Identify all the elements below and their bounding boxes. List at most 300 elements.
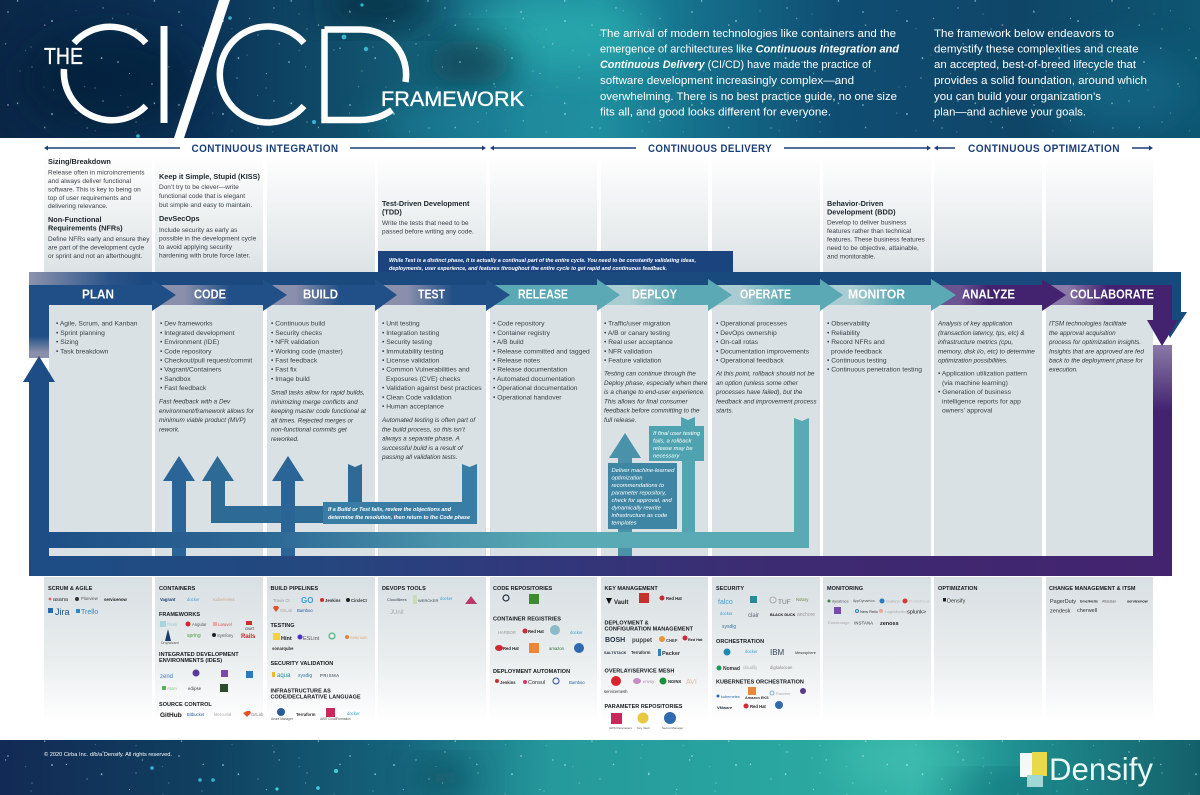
- deploy column text: This allows for final consumer: [604, 398, 688, 405]
- tools: code: SOURCE CONTROL: [159, 702, 212, 708]
- arrow: optimization recommendations: check for approval, and: [612, 498, 673, 504]
- build column text: • Security checks: [271, 330, 323, 337]
- tools: operate: Mesosphere: [795, 651, 816, 655]
- tools: build: Terraform: [296, 712, 316, 717]
- practice: TDD: Test-Driven Development: [382, 199, 470, 208]
- callout: rollback: release may be: [653, 446, 693, 452]
- tools: monitor: Grafana: [886, 600, 901, 604]
- tools: operate: clair: [748, 613, 759, 619]
- tools: code: Symfony: [217, 633, 234, 638]
- tools: deploy: CHEF: [666, 638, 678, 643]
- operate column text: feedback and improvement process: [716, 398, 817, 405]
- arrow: optimization recommendations: parameter repository,: [610, 490, 666, 496]
- build column text: • Working code (master): [271, 348, 343, 356]
- practice: BDD: Develop to deliver business: [827, 220, 907, 226]
- tools: code: GitLab: [251, 712, 264, 717]
- tools: code: zend: [160, 674, 173, 680]
- tools: monitor: LogicMonitor: [885, 610, 907, 614]
- monitor column text: • Reliability: [827, 330, 860, 337]
- collaborate column text: Insights that are approved are fed: [1049, 348, 1144, 356]
- intro paragraph left: Continuous Delivery (CI/CD) have made the practice of: [600, 59, 881, 71]
- release column text: • Release committed and tagged: [493, 348, 590, 356]
- tools: build: AWS CloudFormation: [320, 717, 351, 721]
- tools: collaborate: cherwell: [1077, 608, 1097, 614]
- release column text: • Container registry: [493, 330, 551, 337]
- tools: deploy: [604, 586, 703, 730]
- tools: code: eclipse: [188, 686, 202, 691]
- tools: deploy: PARAMETER REPOSITORIES: [604, 704, 683, 710]
- build column text: • NFR validation: [271, 339, 319, 346]
- code column text: • Sandbox: [160, 376, 191, 383]
- tools: test: [382, 586, 477, 616]
- deploy column text: • NFR validation: [604, 348, 652, 356]
- tools: plan: [48, 586, 128, 617]
- tools: deploy: servicemesh: [604, 689, 628, 694]
- tools: plan: Trello: [81, 609, 98, 616]
- analyze column text: (transaction latency, tps, etc) &: [938, 330, 1025, 337]
- arrow: return to code 1: [163, 456, 195, 556]
- test callout banner: deployments, user experience, and features throughout the entire cycle to get rapid and continuous feedback.: [389, 266, 667, 272]
- build column text: • Continuous build: [271, 320, 325, 328]
- middle column panels: [49, 300, 1153, 556]
- intro paragraph left: The arrival of modern technologies like containers and the: [600, 28, 896, 40]
- tools: code: Kubernetes: [213, 597, 234, 602]
- tools: code: CONTAINERS: [159, 586, 196, 592]
- tools: test: JUnit: [390, 610, 404, 616]
- operate column text: [715, 320, 817, 414]
- practice: TDD: passed before writing any code.: [382, 228, 474, 236]
- arrow: collaborate: [1042, 285, 1172, 305]
- phase arrows: [29, 279, 1172, 320]
- code column text: • Dev frameworks: [160, 320, 213, 328]
- arrow: monitor: [820, 279, 956, 311]
- tools: release: docker: [570, 630, 583, 635]
- tools: code: Vagrant: [160, 597, 176, 602]
- test column text: successful build is a result of: [382, 445, 464, 452]
- practice: KISS and DevSecOps: Don’t try to be clever—write: [159, 184, 239, 191]
- tools: deploy: puppet: [632, 638, 652, 644]
- tools: plan: Planview: [81, 596, 99, 601]
- test column text: Automated testing is often part of: [381, 417, 476, 424]
- analyze column text: Analysis of key application: [937, 320, 1013, 328]
- tools: release: amazon: [549, 646, 565, 651]
- tools: build: GitLab: [280, 608, 293, 613]
- arrow: optimization recommendations: recommendations to: [612, 483, 665, 489]
- tools: monitor: MONITORING: [827, 586, 863, 592]
- tools: deploy: AVI: [686, 679, 697, 686]
- tools: analyze: [938, 586, 978, 604]
- tools: deploy: Terraform: [631, 650, 651, 655]
- loop arrow up on the left side: [23, 285, 55, 576]
- intro paragraph right: provides a solid foundation, around which: [934, 75, 1147, 87]
- test column text: • Clean Code validation: [382, 394, 452, 402]
- analyze column text: [937, 320, 1035, 414]
- practice: KISS and DevSecOps: Include security as early as: [159, 227, 238, 234]
- practice: KISS and DevSecOps: [159, 172, 261, 260]
- operate column text: • Operational feedback: [716, 358, 784, 364]
- test column text: the build process, so this isn’t: [382, 426, 465, 433]
- intro paragraph left: fits all, and good looks different for everyone.: [600, 106, 831, 118]
- practice: TDD: (TDD): [382, 208, 402, 216]
- tools: operate: IBM: [770, 648, 785, 657]
- tools: build: CircleCI: [351, 598, 367, 603]
- arrow: return to code 2: [202, 456, 362, 523]
- test column text: • Unit testing: [382, 320, 420, 328]
- arrow: plan: [29, 279, 176, 320]
- practice: sizing and NFRs: are part of the development cycle: [48, 244, 144, 252]
- tools: test: DEVOPS TOOLS: [382, 586, 426, 592]
- operate column text: an option (unless some other: [716, 380, 799, 387]
- arrow: test: [375, 279, 510, 311]
- build column text: reworked.: [271, 436, 299, 443]
- tools: operate: docker: [720, 611, 733, 616]
- analyze column text: memory, disk i/o, etc) to determine: [938, 348, 1035, 356]
- practice: sizing and NFRs: Requirements (NFRs): [48, 224, 123, 232]
- phase labels: [82, 286, 1154, 302]
- code column text: environment/framework allows for: [159, 408, 255, 415]
- deploy column text: • Feature validation: [604, 358, 662, 364]
- arrow: release: [486, 279, 620, 311]
- analyze column text: • Application utilization pattern: [938, 370, 1027, 378]
- intro paragraph left: emergence of architectures like Continuous Integration and: [600, 44, 904, 56]
- practice: sizing and NFRs: Non-Functional: [48, 215, 102, 224]
- monitor column text: • Continuous testing: [827, 358, 887, 364]
- operate column text: • On-call rotas: [716, 339, 759, 346]
- deploy column text: • A/B or canary testing: [604, 330, 670, 337]
- outer loop: top band: [29, 272, 1181, 286]
- practice: sizing and NFRs: Release often in microincrements: [48, 170, 145, 176]
- code column text: minimum viable product (MVP): [159, 417, 246, 424]
- arrow: return to build: [272, 456, 304, 556]
- practice: TDD: Write the tests that need to be: [382, 220, 469, 227]
- intro paragraph left: overwhelming. There is no best practice guide, no one size: [600, 91, 897, 103]
- operate column text: • Operational processes: [716, 320, 788, 328]
- arrow: optimization recommendations: [608, 433, 677, 556]
- tools: release: Consul: [528, 680, 545, 686]
- phase labels: CODE: [194, 286, 226, 302]
- arrow: optimization recommendations: optimization: [612, 476, 642, 482]
- top column panels: [44, 154, 1153, 272]
- code column text: • Checkout/pull request/commit: [160, 358, 252, 364]
- build column text: • Fast feedback: [271, 358, 318, 364]
- practice: KISS and DevSecOps: DevSecOps: [159, 214, 200, 223]
- arrow: optimization recommendations: Deliver machine-learned: [612, 468, 675, 474]
- deploy column text: • Real user acceptance: [604, 339, 673, 346]
- practice: BDD: Behavior-Driven: [827, 199, 883, 208]
- tools: build: docker: [347, 711, 360, 716]
- tools: monitor: [827, 586, 930, 627]
- intro paragraph right: The framework below endeavors to: [934, 28, 1114, 40]
- loop arrow down on the right side: [1147, 272, 1187, 576]
- test column text: • Immutability testing: [382, 348, 444, 356]
- arrow: analyze: [931, 279, 1066, 311]
- tools: build: TESTING: [270, 623, 295, 629]
- build column text: • Fast fix: [271, 366, 297, 374]
- deploy column text: Deploy phase, especially when there: [604, 380, 708, 387]
- deploy column text: is a change to end-user experience.: [604, 389, 705, 396]
- tools: deploy: Secret Manager: [662, 726, 683, 730]
- title: The CI/CD Framework: THE: [44, 43, 83, 69]
- phase labels: DEPLOY: [632, 286, 677, 302]
- tools: code: docker: [187, 597, 200, 602]
- monitor column text: • Observability: [827, 320, 871, 328]
- tools: code: INTEGRATED DEVELOPMENT: [159, 652, 239, 658]
- tools: analyze: OPTIMIZATION: [938, 586, 978, 592]
- practice: sizing and NFRs: delivering relevance.: [48, 203, 108, 210]
- test column text: always a separate phase. A: [382, 436, 460, 442]
- tools: deploy: KEY MANAGEMENT: [604, 586, 658, 592]
- phase labels: MONITOR: [848, 286, 905, 302]
- tools: test: docker: [440, 596, 453, 601]
- code column text: • Integrated development: [160, 330, 235, 337]
- logo: Densify: Densify: [1049, 751, 1153, 787]
- monitor column text: • Record NFRs and: [827, 339, 885, 346]
- tools: build: sysdig: [298, 673, 312, 679]
- analyze column text: infrastructure metrics (cpu,: [938, 339, 1013, 346]
- operate column text: starts.: [716, 408, 733, 414]
- arrow: build: [263, 279, 397, 311]
- tools: build: CODE/DECLARATIVE LANGUAGE: [270, 694, 361, 700]
- tools: operate: cloudify: [743, 665, 758, 670]
- tools: collaborate: servicenow: [1127, 600, 1148, 604]
- section header: continuous delivery: CONTINUOUS DELIVERY: [648, 143, 772, 155]
- tools: test: WERCKER: [418, 598, 439, 603]
- tools: plan: SCRUM & AGILE: [48, 586, 93, 592]
- practice: sizing and NFRs: top of user requirements and: [48, 195, 131, 202]
- tools: code: FRAMEWORKS: [159, 612, 200, 618]
- practice: KISS and DevSecOps: possible in the development cycle: [159, 236, 257, 242]
- phase labels: TEST: [418, 286, 445, 302]
- operate column text: At this point, rollback should not be: [715, 370, 815, 378]
- collaborate column text: back to the deployment phase for: [1049, 358, 1144, 364]
- feedback bar: [49, 532, 809, 548]
- practice: sizing and NFRs: and always deliver functional: [48, 178, 132, 185]
- section header: continuous integration: CONTINUOUS INTEGRATION: [192, 143, 338, 155]
- practice: KISS and DevSecOps: Keep it Simple, Stupid (KISS): [159, 172, 261, 181]
- test column text: [381, 320, 482, 461]
- phase labels: PLAN: [82, 286, 114, 302]
- arrow: operate: [708, 279, 843, 311]
- deploy column text: • Traffic/user migration: [604, 320, 671, 328]
- code column text: • Code repository: [160, 348, 212, 356]
- practice: BDD: features rather than technical: [827, 228, 912, 235]
- callout: rollback: If final user testing: [653, 431, 701, 437]
- tools: code: Laravel: [218, 622, 232, 627]
- tools: deploy: Packer: [662, 651, 681, 657]
- tools: monitor: INSTANA: [854, 620, 873, 626]
- tools: test: CloudBees: [387, 597, 407, 602]
- tools: build: SECURITY VALIDATION: [270, 661, 333, 667]
- tools: deploy: CONFIGURATION MANAGEMENT: [604, 626, 694, 632]
- tools: deploy: Red Hat: [688, 638, 703, 642]
- test column text: Exposures (CVE) checks: [386, 376, 461, 383]
- practice: BDD: and monitorable.: [827, 254, 876, 260]
- tools: deploy: AWS Parameters: [609, 726, 633, 730]
- code column text: • Fast feedback: [160, 385, 207, 392]
- phase labels: OPERATE: [740, 286, 791, 302]
- test column text: • Security testing: [382, 339, 432, 346]
- release column text: • Operational handover: [493, 394, 562, 402]
- deploy column text: [604, 320, 708, 424]
- tools: monitor: Prometheus: [909, 600, 930, 604]
- practice: sizing and NFRs: Sizing/Breakdown: [48, 157, 111, 166]
- arrow: optimization recommendations: templates: [612, 520, 637, 526]
- tools: release: Bamboo: [569, 680, 585, 685]
- tools: deploy: Key Vault: [637, 726, 650, 730]
- collaborate column text: ITSM technologies facilitate: [1049, 320, 1127, 328]
- tools: deploy: NGINX: [668, 679, 681, 684]
- tools: release: HARBOR: [498, 630, 516, 635]
- practice: sizing and NFRs: software. This is key to being on: [48, 186, 141, 194]
- practice: sizing and NFRs: [48, 157, 150, 260]
- tools: collaborate: PagerDuty: [1050, 599, 1076, 605]
- callout: rollback: [649, 417, 704, 533]
- bottom tool panels: [44, 577, 1153, 722]
- tools: monitor: dynatrace: [832, 600, 849, 604]
- tools: operate: Rancher: [776, 692, 791, 696]
- test column text: • Human acceptance: [382, 404, 444, 410]
- release column text: • Code repository: [493, 320, 545, 328]
- tools: operate: ORCHESTRATION: [716, 639, 764, 645]
- tools: deploy: BOSH: [605, 637, 625, 644]
- tools: plan: servicenow: [104, 597, 128, 602]
- operate column text: • Documentation improvements: [716, 348, 810, 356]
- plan column text: • Task breakdown: [56, 348, 109, 356]
- tools: build: GO: [301, 596, 313, 605]
- tools: release: DEPLOYMENT AUTOMATION: [493, 669, 570, 675]
- monitor column text: • Continuous penetration testing: [827, 366, 922, 374]
- test column text: • Validation against best practices: [382, 385, 482, 392]
- build column text: • Image build: [271, 376, 310, 383]
- callout: build or test fails: [323, 464, 477, 524]
- tools: release: CODE REPOSITORIES: [493, 586, 553, 592]
- tools: collaborate: [1049, 586, 1148, 614]
- collaborate column text: the approval acquisition: [1049, 330, 1116, 337]
- tools: monitor: splunk>: [907, 610, 926, 616]
- test column text: • Common Vulnerabilities and: [382, 366, 470, 374]
- tools: build: aqua: [277, 673, 291, 679]
- practice: BDD: Development (BDD): [827, 208, 896, 216]
- tools: build: Azure Manager: [271, 717, 294, 721]
- arrow: optimization recommendations: infrastructure as code: [612, 513, 668, 519]
- tools: deploy: envoy: [643, 679, 655, 684]
- tools: code: Angular: [192, 622, 207, 627]
- intro paragraph right: plan—and achieve your goals.: [934, 106, 1086, 118]
- tools: operate: falco: [718, 599, 733, 606]
- tools: collaborate: CHANGE MANAGEMENT & ITSM: [1049, 586, 1136, 592]
- tools: build: [270, 586, 368, 721]
- tools: release: [493, 586, 585, 686]
- practice: KISS and DevSecOps: but simple and easy to maintain.: [159, 202, 252, 209]
- tools: monitor: Elasticstage: [828, 620, 850, 625]
- plan column text: • Agile, Scrum, and Kanban: [56, 320, 138, 328]
- tools: code: GWT: [245, 626, 255, 631]
- tools: operate: Red Hat: [750, 704, 766, 709]
- build column text: keeping master code functional at: [271, 408, 366, 415]
- tools: operate: kubernetes: [721, 695, 740, 699]
- arrow: optimization recommendations: dynamically rewrite: [612, 506, 662, 512]
- teal rollback column: [794, 418, 809, 548]
- callout: rollback: fails, a rollback: [653, 438, 692, 444]
- release column text: • Release notes: [493, 358, 541, 364]
- tools: collaborate: zendesk: [1050, 608, 1071, 614]
- tools: code: GitHub: [160, 712, 182, 719]
- practice: TDD: [382, 199, 474, 236]
- build column text: all times. Rejected merges or: [271, 417, 354, 424]
- plan column text: • Sprint planning: [56, 330, 105, 337]
- tools: operate: Amazon EKS: [745, 696, 769, 700]
- phase labels: COLLABORATE: [1070, 286, 1154, 302]
- analyze column text: • Generation of business: [938, 389, 1012, 396]
- callout: build or test fails: If a Build or Test fails, review the objections and: [328, 507, 457, 513]
- callout: build or test fails: determine the resolution, then return to the Code phase: [328, 515, 471, 521]
- tools: operate: digitalocean: [770, 665, 793, 670]
- practice: KISS and DevSecOps: functional code that is elegant: [159, 193, 245, 200]
- bottom band of the loop: [29, 556, 1172, 576]
- build column text: minimizing merge conflicts and: [271, 399, 358, 406]
- tools: build: Hint: [281, 636, 292, 642]
- tools: operate: VMware: [717, 705, 733, 710]
- collaborate column text: execution.: [1049, 366, 1078, 374]
- tools: operate: SECURITY: [716, 586, 744, 592]
- code column text: Fast feedback with a Dev: [159, 398, 231, 406]
- release column text: • Operational documentation: [493, 385, 578, 392]
- tools: monitor: New Relic: [860, 609, 878, 614]
- arrow: code: [152, 279, 287, 311]
- tools: code: Dropwizard: [161, 641, 179, 645]
- tools: release: CONTAINER REGISTRIES: [493, 616, 561, 622]
- tools: release: Red Hat: [528, 629, 544, 634]
- tools: deploy: OVERLAY/SERVICE MESH: [604, 668, 674, 674]
- footer background: nebula: [0, 740, 1200, 795]
- copyright: © 2020 Cirba Inc. d/b/a Densify. All rights reserved.: [44, 751, 172, 758]
- deploy column text: full release.: [604, 417, 636, 424]
- practice: KISS and DevSecOps: hardening with brute force later.: [159, 252, 250, 260]
- build column text: Small tasks allow for rapid builds,: [271, 390, 365, 396]
- practice: BDD: features. These business features: [827, 236, 926, 244]
- tools: plan: asana: [53, 597, 69, 603]
- tools: operate: sysdig: [722, 624, 736, 630]
- plan column text: • Sizing: [56, 339, 79, 346]
- tools: operate: TUF: [778, 599, 791, 606]
- intro paragraph left: software development increasingly complex—and: [600, 75, 854, 87]
- tools: deploy: Vault: [614, 600, 628, 606]
- test column text: • License validation: [382, 358, 440, 364]
- tools: build: BUILD PIPELINES: [270, 586, 318, 592]
- tools: operate: Nomad: [723, 666, 740, 672]
- header background: space nebula: [0, 0, 1200, 145]
- tools: collaborate: Atlassian: [1102, 600, 1116, 604]
- tools: operate: BLACK DUCK: [770, 613, 796, 617]
- test callout banner: [378, 251, 733, 275]
- tools: operate: [716, 586, 816, 710]
- section header: continuous delivery: [490, 143, 931, 155]
- release column text: • A/B build: [493, 339, 524, 346]
- test callout banner: While Test is a distinct phase, it is actually a continual part of the entire cycle. You need to be constantly validating ideas,: [389, 258, 721, 264]
- title: The CI/CD Framework: FRAMEWORK: [381, 88, 524, 111]
- analyze column text: (via machine learning): [942, 380, 1008, 387]
- tools: build: INFRASTRUCTURE AS: [270, 688, 331, 694]
- tools: code: Atom: [167, 686, 177, 691]
- deploy column text: Testing can continue through the: [604, 370, 696, 378]
- tools: code: Mercurial: [214, 712, 231, 717]
- tools: code: Bitbucket: [187, 712, 205, 717]
- arrow: deploy: [597, 279, 732, 311]
- tools: build: Bamboo: [297, 608, 313, 613]
- tools: code: Rails: [241, 634, 256, 640]
- tools: operate: docker: [745, 649, 758, 654]
- tools: monitor: zenoss: [880, 621, 899, 627]
